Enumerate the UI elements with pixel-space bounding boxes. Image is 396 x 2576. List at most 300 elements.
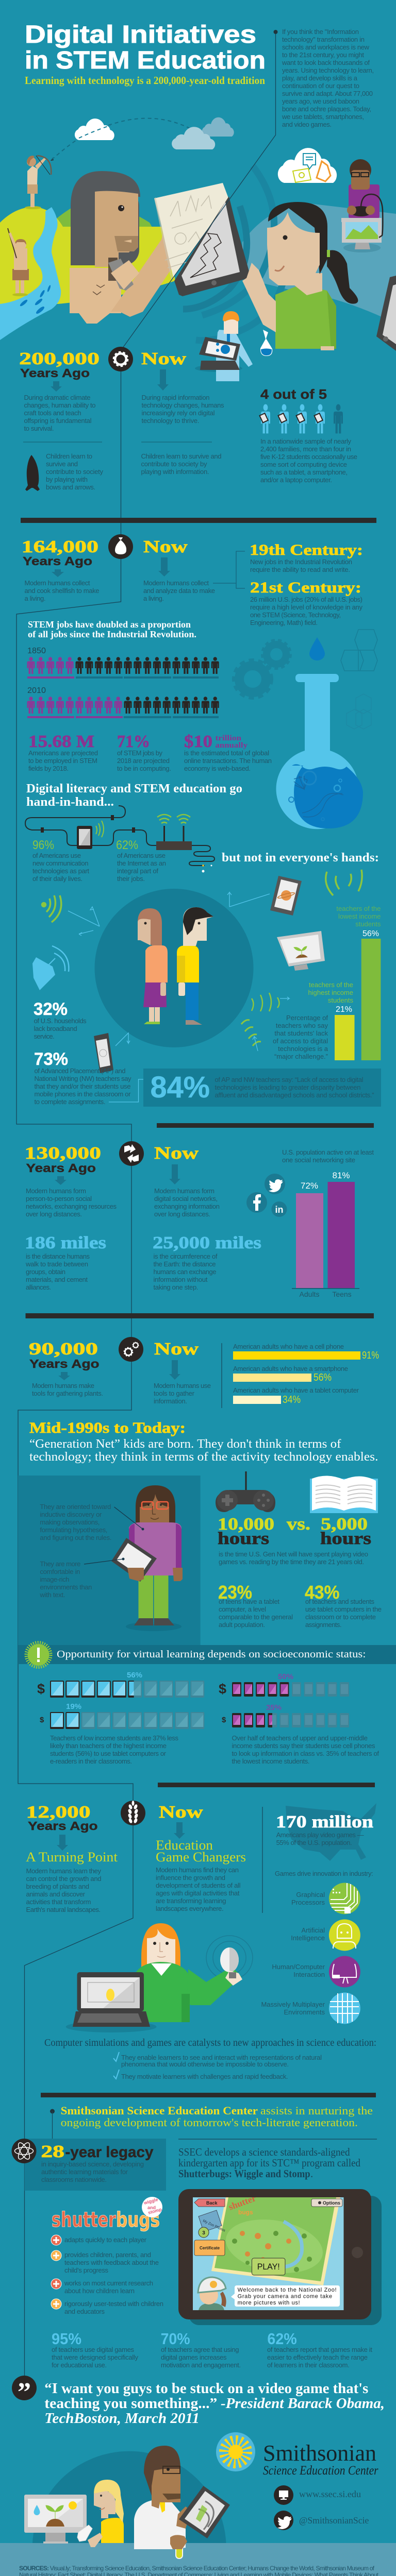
spear child — [8, 228, 29, 296]
19th century text: New jobs in the Industrial Revolution — [250, 558, 352, 566]
money bag badge — [108, 534, 133, 559]
text: inductive discovery: They are oriented toward — [40, 1503, 111, 1511]
speech bubble: Grab your camera and come take — [238, 2294, 332, 2300]
text: image-rich: They are more — [40, 1560, 80, 1568]
USA map — [286, 1803, 376, 1861]
icon: satellite dish — [32, 946, 69, 990]
heading: simulations: Computer simulations and games are catalysts to new approaches in science education: — [44, 2037, 376, 2048]
text: bows and arrows: by playing with — [46, 476, 88, 483]
text: social networks: Modern humans form — [26, 1187, 86, 1195]
intro text: want to look back thousands of — [282, 59, 370, 66]
callout: 84%: technologies is leading to greater disparity between — [214, 1083, 361, 1091]
gears badge — [119, 1337, 143, 1362]
STEM jobs heading — [28, 619, 196, 639]
stat: 62%: 62% — [116, 838, 138, 852]
stat: 32%: 32% — [34, 999, 68, 1019]
text: ssec app: Shutterbugs: Wiggle and Stomp — [178, 2167, 310, 2180]
list: shutterbugs features: teachers with feedback about the — [64, 2259, 159, 2266]
stat: 32% — [34, 999, 87, 1040]
footer panel — [0, 2543, 396, 2576]
text: image-rich: with text. — [39, 1591, 65, 1599]
section: 12,000 years ago — [26, 1801, 376, 2024]
intro text: years ago, we used baboon — [282, 97, 359, 105]
massively multiplayer: Massively Multiplayer — [261, 2001, 325, 2008]
icon: flask — [276, 674, 363, 829]
stat: $10 trillion: economy is web-based. — [184, 765, 251, 772]
21st century text: require a high level of knowledge in any — [250, 603, 363, 611]
pointer dots — [122, 1528, 144, 1560]
chart 2010 — [27, 686, 219, 718]
app map: shutter — [227, 2193, 257, 2212]
stat: 73%: mobile phones in the classroom or — [34, 1090, 131, 1098]
heading: a turning point: A Turning Point — [26, 1850, 118, 1865]
icon: tablet with planet — [270, 876, 302, 916]
text: shellfish — [25, 579, 99, 602]
icon: game controller — [216, 1471, 275, 1512]
concentric arcs — [183, 166, 286, 341]
stat: 10,000 vs 5,000 hours: hours — [320, 1529, 371, 1548]
text: information tools: information. — [154, 1397, 187, 1405]
timeline line — [16, 32, 275, 2376]
speech bubble — [231, 2285, 340, 2307]
graphical processors: Graphical — [296, 1891, 325, 1899]
heading 164,000: 164,000 — [22, 537, 98, 556]
heading: mid-1990s: Mid-1990s to Today: — [29, 1419, 186, 1436]
bar chart: device ownership: 56% — [314, 1372, 332, 1383]
21st century text: Engineering, Math) field. — [250, 619, 318, 626]
chart 1850: 1850 — [27, 647, 46, 655]
bars: teachers challenge: “major challenge.” — [274, 1053, 328, 1060]
bars: teachers challenge: technologies is a — [278, 1045, 328, 1053]
text: plants: Modern humans make — [32, 1382, 94, 1389]
checks — [113, 2052, 119, 2079]
stat: $10 trillion: trillion — [216, 734, 242, 742]
stat: 62% — [267, 2330, 372, 2369]
text: turning point: Modern humans learn they — [26, 1867, 101, 1875]
arrow path — [52, 118, 191, 160]
stat: 62%: the Internet as an — [117, 859, 166, 867]
intro text — [282, 28, 374, 128]
text: climate: offspring is fundamental — [24, 417, 92, 425]
stat: 23%: of teens have a tablet — [219, 1598, 279, 1605]
stat: 186 miles: is the distance humans — [26, 1252, 90, 1260]
artificial intelligence — [291, 1920, 360, 1951]
logo: smithsonian sun — [216, 2432, 255, 2471]
app map: bugs — [238, 2209, 253, 2216]
stat: 186 miles: alliances. — [26, 1283, 51, 1291]
bracket connector — [213, 551, 245, 588]
bars: teachers challenge: lowest income — [338, 912, 381, 920]
stat: 96%: of Americans use — [32, 852, 81, 859]
stat: 186 miles — [25, 1233, 106, 1291]
icon: facebook — [246, 1192, 267, 1213]
19th century text: require the ability to read and write. — [250, 566, 350, 573]
tablet with app screen — [178, 2189, 382, 2325]
pictogram: tablets by income — [37, 1671, 204, 1729]
text: tablets: students (56%) to use tablet computers or — [50, 1750, 167, 1757]
stat: $10 trillion: is the estimated total of global — [184, 749, 269, 757]
list: shutterbugs features: rigorously user-tested with children — [64, 2300, 163, 2308]
banner: opportunity: Opportunity for virtual learning depends on socioeconomic status: — [57, 1649, 366, 1660]
stat: 15.68 M: Americans are projected — [28, 749, 98, 757]
bars: teachers challenge: 21% — [336, 1005, 352, 1014]
bars: teachers challenge — [273, 905, 381, 1060]
text: digital networks: Modern humans form — [154, 1187, 214, 1195]
pointer 1 — [114, 1507, 143, 1529]
text: climate: changes, human ability to — [24, 401, 96, 409]
stone tablet — [154, 183, 229, 280]
section: 200,000 years ago — [19, 347, 357, 491]
stat: 73% — [34, 1049, 131, 1106]
logo: shutterbugs: stomp — [147, 2207, 162, 2215]
certificate button — [194, 2240, 225, 2256]
text: data — [143, 579, 215, 602]
bar chart: device ownership: American adults who have a smartphone — [233, 1365, 348, 1372]
cloud with icons — [278, 148, 337, 183]
stat: 15.68 M — [28, 732, 98, 772]
green hills — [52, 201, 155, 232]
stat: 71% — [117, 732, 171, 772]
pictogram: phones by income: $ — [222, 1716, 226, 1724]
bar chart: social networking: 72% — [301, 1181, 318, 1191]
river — [0, 207, 61, 340]
pictogram: tablets by income: $ — [37, 1681, 45, 1697]
scientist with laptop — [195, 311, 272, 381]
zoo photos card: 3 — [202, 2230, 205, 2236]
bar chart: device ownership: 91% — [362, 1350, 379, 1361]
quote: teaching you something...” — [44, 2396, 217, 2412]
lime ground — [0, 207, 175, 304]
stat: 96%: of their daily lives. — [32, 875, 82, 883]
intro text: continuation of our quest to — [282, 82, 359, 90]
arrows — [55, 1164, 180, 1185]
figure: girl at monitor — [24, 2480, 124, 2547]
smithsonian statement: Smithsonian Science Education Center — [61, 2104, 258, 2117]
title: Digital Initiatives — [25, 21, 256, 48]
stat: 23%: computer, a level — [219, 1605, 266, 1613]
app map — [211, 2193, 340, 2285]
heading years ago: Years Ago — [26, 1161, 96, 1175]
text: climate: craft tools and teach — [24, 409, 81, 417]
play button: PLAY! — [257, 2262, 280, 2272]
text: playing with information: playing with information. — [141, 468, 209, 476]
grey clouds — [202, 117, 234, 137]
signal icons — [42, 870, 362, 1046]
stat: 25,000 miles: information without — [154, 1276, 208, 1283]
dashed arc over cloud — [79, 125, 111, 138]
title: in STEM Education — [25, 47, 266, 74]
stat: 186 miles: materials, and cement — [26, 1276, 88, 1283]
pictogram: phones by income: $ — [219, 1681, 226, 1697]
intro text: to the 21st century, you might — [282, 51, 364, 59]
text: turning point: Earth's natural landscapes. — [26, 1906, 101, 1913]
icon: water drop — [309, 637, 325, 660]
text: shellfish: a living. — [25, 595, 45, 602]
options button: Options — [323, 2200, 340, 2206]
stat: 10,000 vs 5,000 hours: 5,000 — [321, 1515, 368, 1534]
right tablet — [376, 276, 396, 351]
speech bubble: Welcome back to the National Zoo! — [238, 2287, 337, 2293]
zoo photos card — [199, 2210, 226, 2238]
list: shutterbugs features: child's progress — [64, 2266, 108, 2274]
stat: 186 miles: groups, obtain — [26, 1268, 65, 1276]
drawing tablet — [174, 196, 250, 296]
human computer interaction: Interaction — [293, 1971, 325, 1978]
list: benefits: They motivate learners with challenges and rapid feedback. — [121, 2073, 288, 2080]
arrows — [57, 1822, 185, 1851]
smithsonian statement: assists in nurturing the — [260, 2104, 373, 2117]
massively multiplayer — [261, 1993, 360, 2024]
text: tablets: Teachers of low income students are 37% less — [50, 1734, 178, 1742]
heading years ago: Years Ago — [29, 1357, 100, 1370]
21st century text: 26 million U.S. jobs (20% of all U.S. jobs) — [250, 596, 362, 603]
heading: education game changers: Game Changers — [156, 1850, 246, 1865]
heading: digital literacy — [26, 782, 242, 809]
21st century text: one STEM (Science, Technology, — [250, 611, 341, 619]
stat: $10 trillion: online transactions. The human — [184, 757, 272, 765]
text: information: technology to thrive. — [141, 417, 199, 425]
wire — [25, 806, 214, 866]
bars: teachers challenge: 56% — [362, 929, 379, 938]
panel: 28-year legacy: authentic learning materials for — [41, 2168, 128, 2176]
intro text: bone and ochre plaques. Today, — [282, 105, 371, 113]
stat: 10,000 vs 5,000 hours: games vs. reading by the time they are 21 years old. — [219, 1558, 364, 1566]
stat: 71%: 2018 are projected — [117, 757, 170, 765]
text: social networks: networks, exchanging resources — [26, 1202, 117, 1210]
text: social networks — [26, 1187, 117, 1218]
stat: 62%: of Americans use — [117, 852, 166, 859]
heading now: Now — [154, 1144, 199, 1163]
quote — [44, 2381, 385, 2427]
pictogram: phones by income: 35% — [266, 1703, 282, 1712]
intro text: play, and develop skills is a — [282, 74, 358, 82]
fish — [19, 285, 51, 315]
text: game changers: development of students of all — [156, 1882, 241, 1889]
text: survey: such as a tablet, a smartphone, — [260, 468, 348, 476]
21st century text — [250, 596, 363, 626]
stat: 23% — [218, 1582, 293, 1629]
pointer 2 — [84, 1559, 123, 1564]
quote: TechBoston, March 2011 — [44, 2411, 200, 2427]
stat: 43%: of teachers and students — [305, 1598, 374, 1605]
arrows — [58, 1360, 180, 1380]
text: tablets: e-readers in their classrooms. — [50, 1757, 132, 1765]
bar chart: social networking: Teens — [332, 1290, 352, 1298]
list: shutterbugs features: and educators — [64, 2308, 105, 2315]
text: phones: Over half of teachers of upper and upper-middle — [232, 1734, 368, 1742]
list: shutterbugs features: adapts quickly to each player — [64, 2236, 147, 2244]
19th century: 19th Century: — [250, 541, 363, 558]
certificate button: Certificate — [200, 2246, 220, 2250]
text: game changers — [156, 1866, 241, 1912]
heading: generation net: technology; they think in terms of the activity technology enables. — [29, 1450, 378, 1464]
heading years ago: Years Ago — [23, 554, 92, 568]
atom badge — [11, 2139, 36, 2163]
icon: monitor with sprout — [277, 931, 325, 971]
text: playing with information — [141, 452, 222, 476]
text: game changers: Modern humans find they can — [156, 1866, 239, 1874]
text: inductive discovery: inductive discovery or — [40, 1511, 102, 1518]
stat: 43%: 43% — [305, 1582, 339, 1603]
archer on hill — [25, 156, 54, 209]
heading 200,000: 200,000 — [19, 349, 100, 368]
text: turning point: animals and discover — [26, 1890, 86, 1898]
big caveman — [70, 171, 174, 324]
stat: 62%: integral part of — [117, 867, 158, 875]
options button — [311, 2199, 342, 2207]
stat: 25,000 miles — [153, 1233, 261, 1291]
stat: 62%: of learners in their classroom. — [267, 2361, 350, 2369]
stat: 95%: that were designed specifically — [52, 2353, 138, 2361]
bars: teachers challenge: of access to digital — [273, 1037, 328, 1045]
chart 2010: 2010 — [27, 686, 46, 695]
text: digital networks — [154, 1187, 220, 1218]
text: bows and arrows: contribute to society — [46, 468, 103, 476]
heading now: Now — [159, 1803, 203, 1822]
text: social networks: person-to-person social — [26, 1195, 92, 1202]
text: bows and arrows — [46, 452, 103, 491]
logo: shutterbugs: and — [147, 2205, 156, 2210]
link: website — [274, 2485, 361, 2505]
sources — [19, 2565, 379, 2576]
stat: 15.68 M: 15.68 M — [28, 732, 94, 751]
stat: 15.68 M: fields by 2018. — [28, 765, 69, 772]
bar chart: social networking — [292, 1171, 359, 1298]
rings — [206, 1936, 253, 1980]
stat: 10,000 vs 5,000 hours — [218, 1515, 371, 1566]
stat: 95% — [52, 2330, 138, 2369]
pictogram: tablets by income: $ — [40, 1716, 44, 1724]
bar chart: device ownership: 34% — [283, 1394, 301, 1405]
woman figure — [138, 908, 168, 1024]
divider bar — [41, 2093, 376, 2097]
stat: 43%: assignments. — [305, 1621, 341, 1629]
pictogram: tablets by income: 19% — [66, 1702, 81, 1711]
text: ssec app: . — [310, 2167, 313, 2180]
text: turning point — [26, 1867, 101, 1913]
heading years ago: Years Ago — [28, 1819, 98, 1833]
4 out of 5: 4 out of 5 — [260, 386, 327, 402]
callout connector — [109, 1078, 148, 1102]
arrows — [51, 369, 169, 392]
text: phones: the lowest income students. — [232, 1757, 309, 1765]
list: shutterbugs features — [51, 2235, 163, 2315]
banner: opportunity — [18, 1642, 396, 1667]
bars: teachers challenge: highest income — [308, 989, 353, 996]
pictogram: tablets by income: 56% — [127, 1671, 142, 1680]
artificial intelligence: Intelligence — [291, 1934, 325, 1942]
bars: teachers challenge: teachers who say — [276, 1022, 328, 1029]
text: inductive discovery: formulating hypotheses, — [40, 1526, 107, 1534]
arrows light blue — [68, 892, 289, 1051]
text: game changers: landscapes everywhere. — [156, 1905, 224, 1912]
text: play video games: 55% of the U.S. population. — [276, 1839, 352, 1846]
heading now: Now — [154, 1340, 199, 1359]
stat: 25,000 miles: humans can exchange — [154, 1268, 217, 1276]
people with tablets — [260, 404, 343, 433]
figure: scientist with tablet — [134, 2446, 230, 2559]
text: bows and arrows: bows and arrows. — [46, 483, 95, 491]
text: playing with information: contribute to society by — [141, 460, 207, 468]
text: information: During rapid information — [141, 394, 209, 401]
wheat badge — [121, 1801, 145, 1825]
stat: 73%: that they and/or their students use — [34, 1082, 131, 1090]
text: social networks: over long distances. — [26, 1210, 82, 1218]
section: 130,000 years ago — [25, 1141, 374, 1298]
text: digital networks: digital social networks, — [154, 1195, 218, 1202]
stat: 32%: service. — [34, 1032, 55, 1040]
wire knots — [41, 815, 135, 833]
stat: 62%: 62% — [267, 2330, 297, 2348]
stat: 32%: of U.S. households — [34, 1017, 87, 1025]
stat: 73%: 73% — [34, 1049, 68, 1069]
text: tablets — [50, 1734, 178, 1765]
text: data: Modern humans collect — [143, 579, 209, 587]
stat: $10 trillion: $10 — [184, 732, 212, 751]
bars: teachers challenge: students — [328, 996, 353, 1004]
girl with ponytail — [242, 202, 358, 350]
list: benefits: phenomena that would otherwise be impossible to observe. — [121, 2060, 289, 2068]
logo: shutterbugs — [52, 2197, 162, 2232]
text: data: a living. — [143, 595, 164, 602]
stat: 96%: new communication — [32, 859, 89, 867]
zookeeper — [198, 2277, 226, 2310]
logo text — [263, 2441, 378, 2478]
link: twitter — [274, 2511, 369, 2530]
background gears and hexagons — [234, 630, 377, 729]
text: phones: income students say their students use cell phones — [232, 1742, 375, 1750]
heading now: Now — [141, 349, 187, 368]
icon: linkedin — [271, 1201, 287, 1217]
text: survey: and/or a laptop computer. — [260, 476, 332, 484]
panel: 28-year legacy — [11, 2139, 166, 2191]
quote badge — [12, 2376, 37, 2407]
text: shellfish: Modern humans collect — [25, 579, 90, 587]
stat: 186 miles: walk to trade between — [25, 1260, 88, 1268]
digital divide circle — [95, 889, 254, 1047]
text: playing with information: Children learn to survive and — [141, 452, 222, 460]
bars: teachers challenge: teachers of the — [336, 905, 381, 912]
smithsonian statement — [50, 2104, 373, 2139]
panel: generation net — [18, 1476, 201, 1645]
figure: educator with lightbulb and laptop — [66, 1923, 253, 2032]
text: information tools: tools to gather — [154, 1389, 195, 1397]
stat: 96%: 96% — [32, 838, 54, 852]
diagonal cut skin hand — [246, 263, 276, 325]
heading years ago: Years Ago — [20, 366, 90, 380]
stat: 70% — [161, 2330, 241, 2369]
stat: 43%: classroom or to complete — [305, 1613, 376, 1621]
play button — [252, 2258, 285, 2275]
bars: teachers challenge: teachers of the — [309, 981, 353, 989]
text: shellfish: and cook shellfish to make — [25, 587, 99, 595]
text: tablets: likely than teachers of the highest income — [50, 1742, 167, 1750]
divider bar — [158, 1783, 375, 1787]
bar chart: device ownership: American adults who have a tablet computer — [233, 1386, 359, 1394]
quote: “I want you guys to be stuck on a video game that's — [44, 2381, 368, 2397]
stat: 10,000 vs 5,000 hours: is the time U.S. Gen Net will have spent playing video — [219, 1550, 368, 1558]
gamer with monitor — [341, 159, 383, 252]
stat: 95%: of teachers use digital games — [52, 2346, 134, 2353]
text: play video games: Americans play video games — — [276, 1831, 364, 1839]
intro text: and video games. — [282, 121, 332, 128]
panel: 28-year legacy: classrooms nationwide. — [41, 2176, 107, 2183]
text: ssec app: SSEC develops a science standards-aligned — [178, 2146, 350, 2158]
text: information: increasingly rely on digital — [141, 409, 215, 417]
text: bows and arrows: Children learn to — [46, 452, 92, 460]
19th century text — [250, 558, 352, 573]
text: survey — [260, 437, 357, 484]
